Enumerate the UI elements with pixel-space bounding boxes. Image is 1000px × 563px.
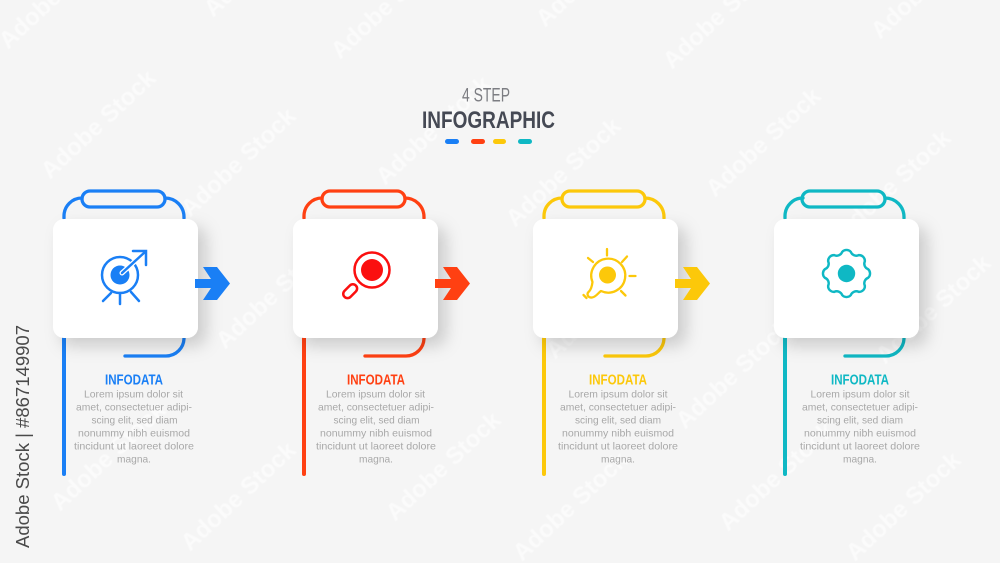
- icon: light bulb: [584, 249, 636, 298]
- icon: gear badge: [823, 250, 870, 297]
- body text 2: Lorem ipsum dolor sit: [326, 388, 425, 400]
- step 4: [774, 191, 920, 474]
- watermarks: Adobe Stock: [176, 436, 302, 556]
- body text 3: tincidunt ut laoreet dolore: [558, 440, 678, 452]
- body text 4: [800, 388, 920, 466]
- step 1 outline: [64, 191, 184, 474]
- body text 3: Lorem ipsum dolor sit: [568, 388, 668, 400]
- step 1: [53, 191, 230, 474]
- body text 4: amet, consectetuer adipi-: [802, 402, 918, 414]
- body text 3: amet, consectetuer adipi-: [560, 402, 676, 414]
- colour dashes: [445, 139, 532, 144]
- step 4 outline: [785, 191, 904, 474]
- body text 1: magna.: [117, 454, 151, 466]
- step 4 card: [774, 219, 919, 338]
- body text 1: tincidunt ut laoreet dolore: [74, 440, 194, 452]
- watermarks: Adobe Stock: [671, 314, 797, 434]
- body text 4: Lorem ipsum dolor sit: [810, 388, 910, 400]
- watermarks: Adobe Stock: [371, 70, 497, 190]
- watermarks: Adobe Stock: [841, 446, 967, 563]
- body text 3: nonummy nibh euismod: [562, 428, 674, 440]
- body text 2: [316, 388, 436, 466]
- body text 2: amet, consectetuer adipi-: [318, 402, 434, 414]
- watermarks: Adobe Stock: [176, 102, 302, 222]
- step 3 outline: [544, 191, 664, 474]
- body text 1: nonummy nibh euismod: [78, 428, 190, 440]
- watermarks: Adobe Stock: [46, 396, 172, 516]
- icon: magnifier: [342, 252, 390, 300]
- watermarks: Adobe Stock: [36, 64, 162, 184]
- watermarks: Adobe Stock: [381, 406, 507, 526]
- watermarks: Adobe Stock: [831, 124, 957, 244]
- body text 2: scing elit, sed diam: [334, 414, 420, 426]
- arrow 3: [675, 267, 710, 300]
- watermarks: Adobe Stock: [508, 446, 634, 563]
- watermarks: Adobe Stock: [211, 234, 337, 354]
- heading 3: INFODATA: [589, 372, 647, 388]
- watermarks: Adobe Stock: [501, 112, 627, 232]
- step 2 outline: [304, 191, 424, 474]
- heading 4: INFODATA: [831, 372, 889, 388]
- step 3 card: [533, 219, 678, 338]
- heading 1: INFODATA: [105, 372, 163, 388]
- step 2: [293, 191, 470, 474]
- title: 4 step: 4 STEP: [462, 86, 510, 106]
- body text 1: scing elit, sed diam: [92, 414, 178, 426]
- title: infographic: INFOGRAPHIC: [422, 107, 555, 134]
- watermarks: Adobe Stock: [701, 82, 827, 202]
- body text 4: nonummy nibh euismod: [804, 428, 916, 440]
- body text 3: [558, 388, 678, 466]
- step 1 card: [53, 219, 198, 338]
- body text 4: scing elit, sed diam: [817, 414, 903, 426]
- body text 2: tincidunt ut laoreet dolore: [316, 440, 436, 452]
- icon: target with arrow: [102, 251, 146, 304]
- body text 2: nonummy nibh euismod: [320, 428, 432, 440]
- watermarks: Adobe Stock: [714, 416, 840, 536]
- heading 2: INFODATA: [347, 372, 405, 388]
- body text 3: magna.: [601, 454, 635, 466]
- arrow 2: [435, 267, 470, 300]
- body text 4: tincidunt ut laoreet dolore: [800, 440, 920, 452]
- body text 2: magna.: [359, 454, 393, 466]
- step 3: [533, 191, 710, 474]
- body text 3: scing elit, sed diam: [575, 414, 661, 426]
- step 2 card: [293, 219, 438, 338]
- watermarks: Adobe Stock: [871, 249, 997, 369]
- title block: [422, 86, 555, 144]
- watermarks: Adobe Stock: [541, 244, 667, 364]
- body text 4: magna.: [843, 454, 877, 466]
- body text 1: Lorem ipsum dolor sit: [84, 388, 183, 400]
- arrow 1: [195, 267, 230, 300]
- body text 1: amet, consectetuer adipi-: [76, 402, 192, 414]
- body text 1: [74, 388, 194, 466]
- stock id label: Adobe Stock | #867149907: [13, 325, 33, 548]
